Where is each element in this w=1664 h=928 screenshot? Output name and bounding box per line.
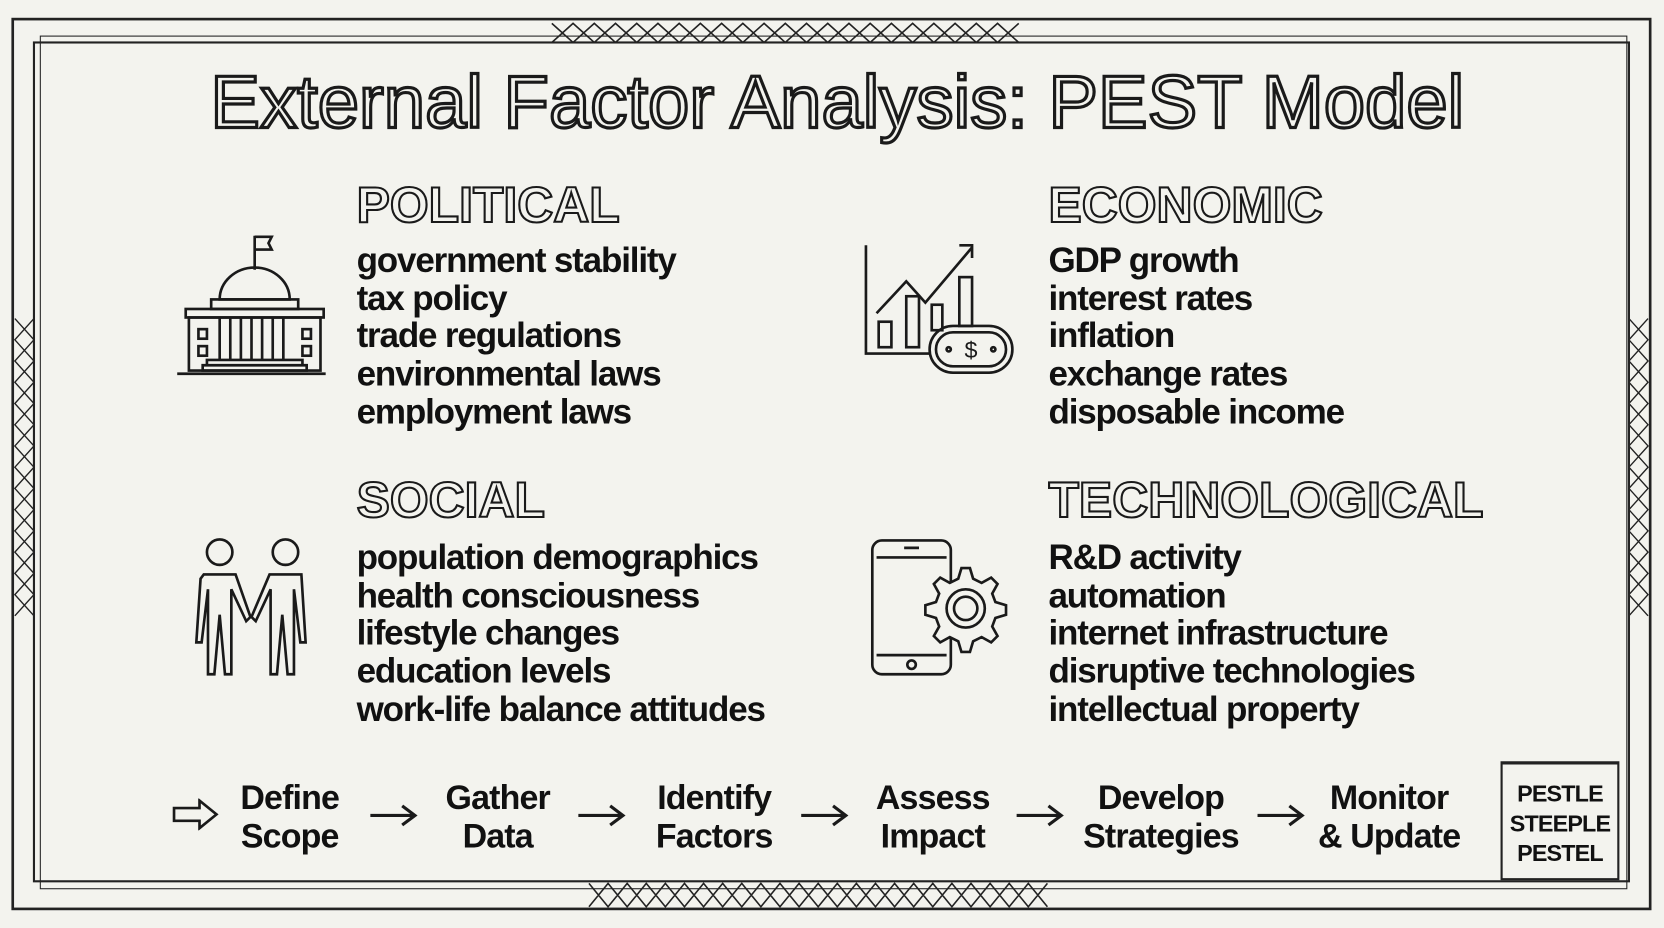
heading: technological: TECHNOLOGICAL: [1048, 471, 1483, 528]
heading: economic: ECONOMIC: [1048, 176, 1323, 233]
step: develop strategies: Develop: [1098, 778, 1224, 817]
variants box: PESTEL: [1517, 840, 1603, 866]
step: assess impact: Impact: [881, 817, 985, 855]
list: political factors: tax policy: [357, 278, 506, 317]
list: social factors: [356, 537, 765, 728]
title: External Factor Analysis: PEST Model: [210, 61, 1464, 143]
list: technological factors: disruptive technologies: [1048, 651, 1415, 690]
arrow: [1258, 804, 1305, 826]
arrow: [370, 804, 418, 826]
step: identify factors: [656, 778, 773, 855]
variants box: STEEPLE: [1510, 810, 1610, 837]
list: social factors: education levels: [357, 651, 610, 690]
step: assess impact: [876, 778, 990, 855]
list: technological factors: automation: [1048, 575, 1226, 614]
panel: political: [177, 176, 677, 431]
step: identify factors: Identify: [657, 778, 771, 817]
list: technological factors: internet infrastructure: [1048, 613, 1387, 652]
list: economic factors: [1048, 240, 1344, 431]
list: social factors: work-life balance attitudes: [357, 689, 765, 728]
icon: phone with gear: [870, 539, 1008, 676]
step: develop strategies: Strategies: [1083, 817, 1239, 855]
list: technological factors: R&D activity: [1048, 537, 1241, 577]
list: economic factors: inflation: [1048, 316, 1174, 355]
icon: two people: [194, 538, 307, 676]
list: social factors: population demographics: [357, 537, 758, 577]
list: economic factors: GDP growth: [1048, 240, 1238, 279]
step: define scope: [240, 778, 339, 855]
arrow: [578, 804, 626, 826]
step: monitor and update: [1318, 778, 1460, 855]
arrow: start hollow: [172, 798, 218, 830]
list: social factors: lifestyle changes: [357, 613, 619, 652]
variants box: [1501, 761, 1619, 880]
list: technological factors: intellectual property: [1048, 689, 1359, 728]
step: monitor and update: Monitor: [1330, 778, 1448, 817]
step: identify factors: Factors: [656, 817, 773, 855]
list: political factors: employment laws: [357, 392, 631, 431]
step: define scope: Scope: [241, 817, 339, 855]
step: assess impact: Assess: [876, 778, 990, 817]
panel: social: [194, 471, 765, 728]
list: economic factors: disposable income: [1048, 392, 1344, 431]
step: define scope: Define: [240, 778, 339, 817]
icon: growth chart with money: $: [965, 337, 978, 363]
step: gather data: Gather: [446, 778, 550, 817]
panel: technological: [870, 471, 1483, 728]
icon: growth chart with money: [864, 244, 1014, 374]
list: political factors: environmental laws: [357, 354, 661, 393]
variants box: PESTLE: [1517, 780, 1603, 807]
icon: government building: [177, 236, 326, 376]
list: political factors: government stability: [357, 240, 676, 279]
step: gather data: Data: [463, 817, 533, 855]
list: technological factors: [1048, 537, 1415, 728]
list: economic factors: interest rates: [1048, 278, 1252, 317]
arrow: [801, 804, 848, 826]
step: gather data: [446, 778, 550, 855]
process flow: [172, 778, 1460, 855]
step: develop strategies: [1083, 778, 1239, 855]
list: political factors: [357, 240, 677, 431]
panel: economic: [864, 176, 1344, 431]
arrow: [1016, 804, 1064, 826]
list: economic factors: exchange rates: [1048, 354, 1287, 393]
list: political factors: trade regulations: [357, 316, 621, 355]
step: monitor and update: & Update: [1318, 817, 1460, 855]
heading: political: POLITICAL: [357, 176, 620, 233]
heading: social: SOCIAL: [357, 471, 545, 528]
list: social factors: health consciousness: [357, 575, 699, 614]
